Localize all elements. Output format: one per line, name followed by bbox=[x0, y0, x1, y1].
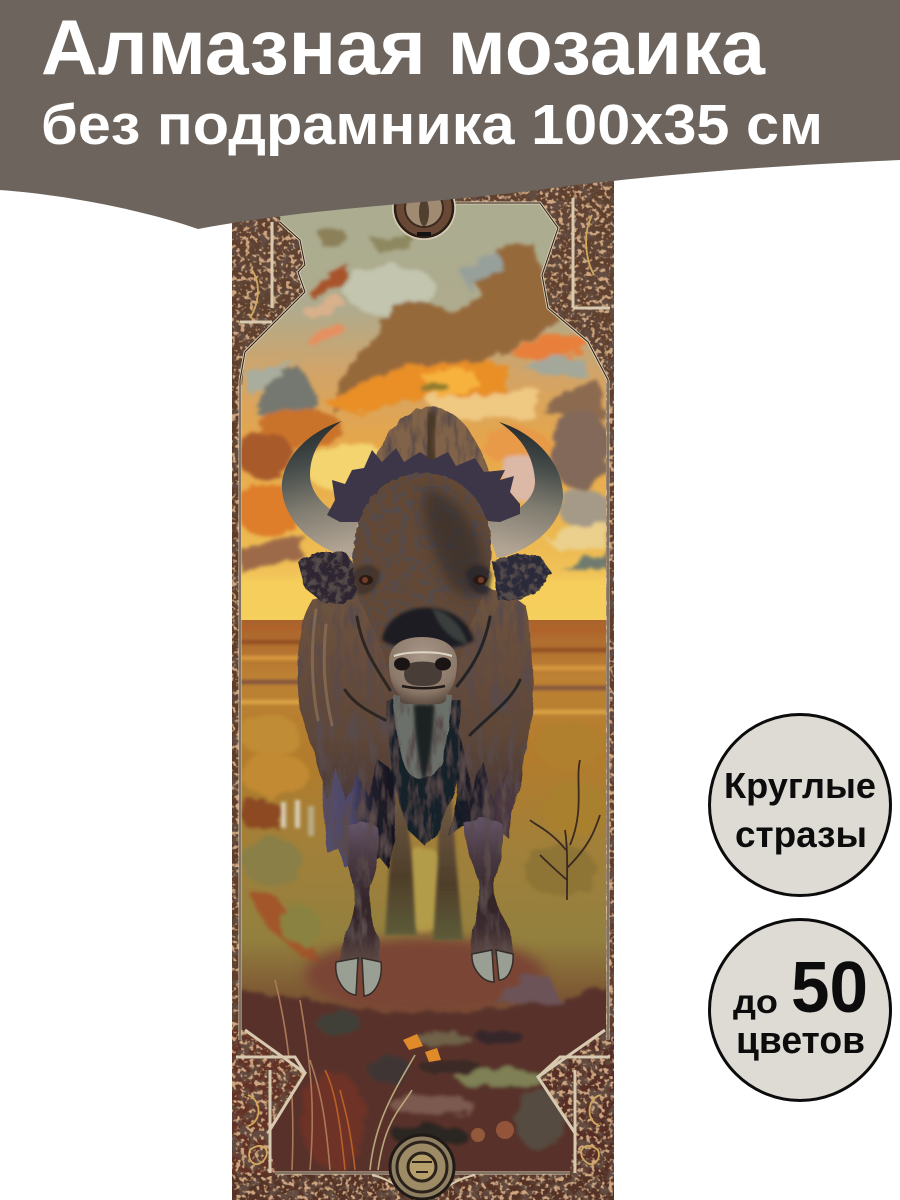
ornamental frame bbox=[232, 170, 614, 1200]
badge: round rhinestones bbox=[710, 714, 890, 896]
left horn bbox=[282, 421, 358, 558]
bottom medallion bbox=[372, 1135, 475, 1200]
bottom strip bbox=[232, 1174, 614, 1200]
badge number: 50: 50 bbox=[791, 948, 868, 1028]
foreground grasses bbox=[275, 980, 415, 1170]
landscape bbox=[232, 620, 614, 1200]
left foreleg fur bbox=[322, 759, 396, 869]
body upper with shaggy lower edge bbox=[298, 578, 533, 802]
dark forehead curls bbox=[352, 488, 492, 649]
clouds bbox=[236, 232, 611, 572]
badge text line 1: Круглые bbox=[724, 765, 876, 806]
top right corner bbox=[455, 182, 606, 373]
horizon glow bbox=[242, 612, 606, 620]
sky bbox=[242, 198, 606, 620]
eyes bbox=[359, 575, 487, 585]
foreground terrain bbox=[242, 972, 606, 1172]
title line 2: без подрамника 100х35 см bbox=[41, 93, 823, 157]
top left corner bbox=[241, 216, 304, 385]
bottom left corner bbox=[232, 1030, 303, 1174]
right horn bbox=[485, 422, 563, 558]
header banner bbox=[0, 0, 900, 229]
right ear bbox=[492, 554, 551, 600]
title bbox=[41, 3, 823, 157]
dirt path bbox=[305, 937, 545, 1013]
body fur strands bbox=[312, 610, 520, 735]
badge: up to 50 colours bbox=[710, 920, 890, 1100]
title line 1: Алмазная мозаика bbox=[41, 3, 766, 91]
badge word: colours: цветов bbox=[736, 1020, 865, 1062]
bison bbox=[282, 407, 563, 996]
frame lines bbox=[236, 198, 610, 1173]
head bbox=[353, 473, 491, 693]
top medallion bbox=[392, 176, 456, 240]
hooves bbox=[336, 950, 513, 996]
orange leaves bbox=[403, 1034, 514, 1142]
beard bbox=[394, 695, 452, 779]
horizon stripes bbox=[242, 639, 606, 716]
chest bbox=[385, 700, 460, 846]
back legs bbox=[385, 790, 463, 940]
badge word: up to: до bbox=[733, 983, 778, 1020]
frame line cores bbox=[240, 203, 608, 1173]
side borders bbox=[232, 385, 614, 1030]
bare tree bbox=[530, 760, 600, 900]
bottom right corner bbox=[540, 1030, 614, 1174]
mane bbox=[327, 448, 520, 522]
painting: bison at sunset bbox=[232, 150, 614, 1200]
lower front legs bbox=[340, 818, 513, 962]
badge text line 2: стразы bbox=[735, 814, 867, 855]
right foreleg fur bbox=[448, 732, 525, 839]
left ear bbox=[298, 552, 358, 604]
waterfall rocks bbox=[281, 800, 314, 836]
muzzle bbox=[389, 637, 457, 704]
gold scrollwork bbox=[248, 215, 600, 1164]
autumn trees bbox=[240, 715, 609, 965]
hump bbox=[376, 406, 489, 472]
